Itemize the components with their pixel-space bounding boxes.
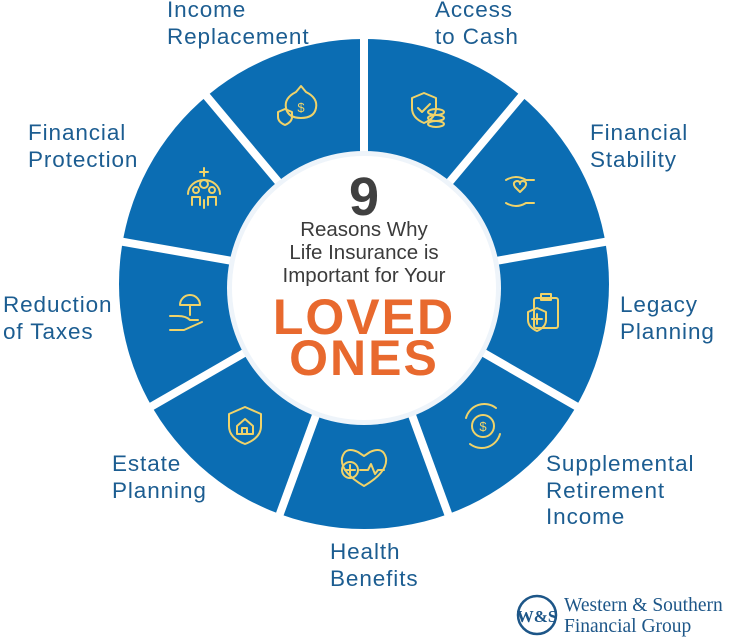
label: health benefits: Benefits <box>330 566 418 590</box>
label: financial protection: Protection <box>28 146 138 172</box>
label: legacy planning: Planning <box>620 318 715 344</box>
label: income replacement: Replacement <box>167 24 309 48</box>
icon: access to cash <box>412 93 444 127</box>
label: supplemental retirement income <box>546 451 694 529</box>
icon: income replacement: $ <box>297 100 305 115</box>
center title: 9 <box>349 167 379 227</box>
label: estate planning: Estate <box>112 451 181 476</box>
logo: Western & Southern <box>564 595 723 616</box>
label: financial stability <box>590 120 688 172</box>
label: health benefits: Health <box>330 539 400 564</box>
center title <box>273 167 455 386</box>
label: financial protection <box>28 120 138 172</box>
logo: Financial Group <box>564 616 691 637</box>
center title: Important for Your <box>283 264 446 287</box>
label: estate planning <box>112 451 207 502</box>
label: reduction of taxes <box>3 292 112 344</box>
label: financial stability: Stability <box>590 146 677 172</box>
icon: health benefits <box>342 450 386 486</box>
icon: reduction of taxes <box>170 295 202 330</box>
icon: supplemental retirement income: $ <box>479 419 487 434</box>
icon: supplemental retirement income <box>466 404 500 448</box>
icon: financial protection <box>188 168 220 208</box>
label: supplemental retirement income: Retirement <box>546 478 665 502</box>
label: income replacement <box>167 0 309 48</box>
icon: legacy planning <box>528 294 558 331</box>
label: supplemental retirement income: Income <box>546 504 625 529</box>
blue ring <box>119 39 609 529</box>
label: financial protection: Financial <box>28 120 126 145</box>
center title: Life Insurance is <box>289 241 439 264</box>
logo: W&S <box>517 607 557 626</box>
label: estate planning: Planning <box>112 478 207 502</box>
label: legacy planning <box>620 292 715 344</box>
label: access to cash: to Cash <box>435 24 519 48</box>
center title: Reasons Why <box>300 218 429 241</box>
label: reduction of taxes: of Taxes <box>3 318 94 344</box>
logo <box>516 594 723 637</box>
icon: estate planning <box>229 407 261 444</box>
label: financial stability: Financial <box>590 120 688 145</box>
icon: financial stability <box>506 177 534 206</box>
label: supplemental retirement income: Supplemental <box>546 451 694 476</box>
center title: LOVED <box>273 289 455 345</box>
label: health benefits <box>330 539 418 590</box>
label: legacy planning: Legacy <box>620 292 698 317</box>
center disc <box>227 151 501 425</box>
center title: ONES <box>289 330 439 386</box>
label: access to cash <box>435 0 519 48</box>
icon: income replacement <box>278 86 316 125</box>
label: reduction of taxes: Reduction <box>3 292 112 317</box>
